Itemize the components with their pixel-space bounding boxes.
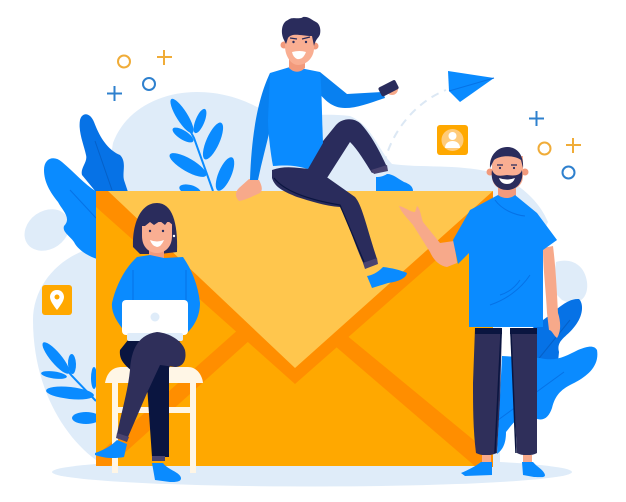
beard <box>492 170 522 190</box>
hair back <box>133 203 177 254</box>
hair <box>490 147 523 168</box>
envelope lower fold bands <box>96 328 250 466</box>
person: standing man in T-shirt <box>399 147 560 477</box>
phone and hand <box>378 79 399 97</box>
leaf: right dark <box>520 299 582 364</box>
front foot shoe <box>367 267 407 288</box>
sparkles: top right <box>529 111 581 178</box>
raised leg cuff <box>371 165 388 174</box>
envelope <box>96 191 493 467</box>
ankles <box>482 455 491 463</box>
background: pale blue blobs <box>16 92 587 470</box>
T-shirt <box>453 195 557 327</box>
under leg <box>120 340 180 457</box>
laptop <box>122 300 188 341</box>
lower shoe <box>152 463 181 482</box>
ground shadow <box>52 458 572 486</box>
dashed flight path <box>384 90 446 164</box>
crossed leg shoe <box>95 440 127 458</box>
right arm sleeve <box>318 72 385 108</box>
neck <box>498 186 516 200</box>
head <box>280 17 320 65</box>
sweater torso and arms <box>112 255 200 332</box>
shoes <box>461 462 492 476</box>
front leg cuff <box>363 258 378 269</box>
crossed leg <box>117 332 186 437</box>
neck <box>289 58 305 72</box>
back leg raised <box>305 119 387 178</box>
sparkles: top left <box>107 50 172 101</box>
left arm sleeve <box>250 73 272 180</box>
face <box>141 208 175 253</box>
left hand <box>236 179 262 201</box>
leaf: top left light <box>44 158 97 259</box>
plant: lower left branch <box>39 339 100 424</box>
front leg <box>272 167 377 265</box>
crossed leg cuff <box>116 433 129 442</box>
leaf: top left dark <box>80 114 128 192</box>
hanging arm and hand <box>543 246 560 338</box>
icon: contact badge <box>437 125 468 155</box>
lower cuff <box>152 456 165 461</box>
icon: paper plane <box>448 71 494 102</box>
hair <box>282 17 320 46</box>
plant: top branch <box>167 96 238 198</box>
raised foot shoe <box>376 174 413 191</box>
stool <box>105 367 203 473</box>
smile <box>292 51 306 59</box>
icon: location badge <box>42 285 72 315</box>
waving arm and hand <box>399 206 457 267</box>
envelope flap <box>108 191 493 368</box>
neck <box>149 248 164 261</box>
trousers <box>473 328 502 455</box>
leaf: right light <box>497 347 597 454</box>
person: woman with laptop on stool <box>95 203 203 482</box>
person: sitting man with phone <box>236 17 413 288</box>
torso sweater <box>268 67 323 169</box>
head <box>486 147 528 190</box>
envelope body <box>96 191 493 466</box>
envelope flap shadow band <box>96 191 493 384</box>
